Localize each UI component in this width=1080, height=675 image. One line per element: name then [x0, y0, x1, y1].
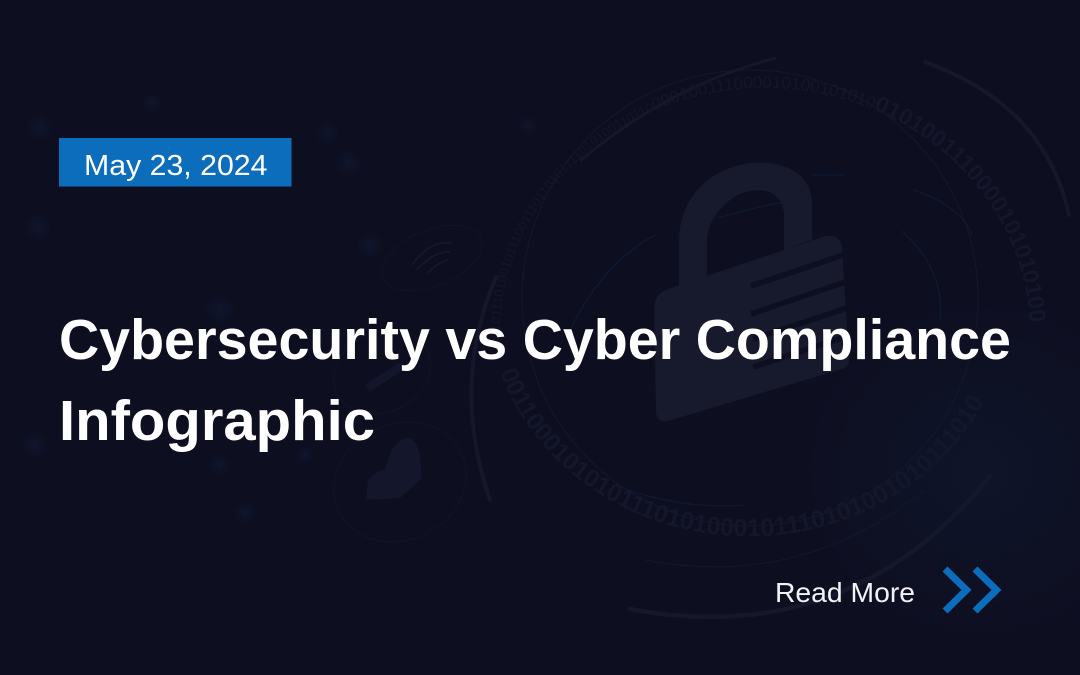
- padlock body: [654, 236, 849, 421]
- background: glowing dots: [21, 93, 538, 525]
- padlock stripes: [751, 254, 851, 367]
- padlock shackle: [679, 162, 812, 290]
- background: circular binary rings: [471, 58, 1069, 617]
- date text: May 23, 2024: [84, 150, 268, 182]
- background: binary digits: 01101110100101110011101101011110101001101100001001110000101001010100101001110000101010100: [491, 76, 1046, 342]
- background: small circuit icons: [0, 212, 492, 590]
- icon: padlock: [654, 162, 851, 421]
- background: thin blue arcs: [569, 175, 972, 506]
- background: binary digits: [491, 76, 1046, 536]
- read more link: Read More: [775, 577, 915, 608]
- title: [59, 308, 1011, 453]
- icon: cloud badge: [314, 401, 486, 563]
- read more link: [775, 569, 996, 611]
- icon: fingerprint badge: [372, 212, 492, 304]
- icon: double chevron arrow: [945, 569, 996, 611]
- title: Cybersecurity vs Cyber Compliance: [59, 308, 1011, 372]
- icon: chip badge: [320, 315, 444, 429]
- title: Infographic: [59, 389, 375, 453]
- date badge: [59, 138, 292, 186]
